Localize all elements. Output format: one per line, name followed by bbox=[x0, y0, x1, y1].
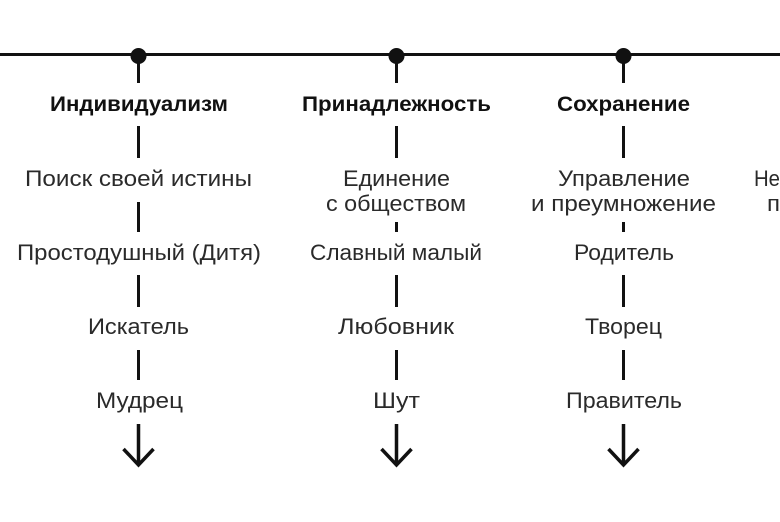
arrow down bbox=[124, 424, 154, 465]
heading: Индивидуализм bbox=[50, 93, 228, 116]
timeline dot bbox=[616, 48, 632, 64]
heading: Принадлежность bbox=[302, 93, 491, 116]
horizontal timeline line bbox=[0, 53, 780, 56]
timeline dot bbox=[130, 48, 146, 64]
label: quest line 1: Единение bbox=[343, 166, 450, 191]
label: archetype 3: Шут bbox=[373, 388, 420, 413]
label: archetype 2: Искатель bbox=[88, 314, 189, 339]
label: archetype 3: Правитель bbox=[566, 388, 682, 413]
label: quest line 1: Управление bbox=[558, 166, 690, 191]
label: quest line 2: и преумножение bbox=[531, 191, 716, 216]
connector stems bbox=[622, 56, 625, 380]
connector stems bbox=[395, 56, 398, 380]
arrow down bbox=[608, 424, 638, 465]
label: quest: Поиск своей истины bbox=[25, 166, 252, 191]
arrow down bbox=[382, 424, 412, 465]
label: archetype 1: Простодушный (Дитя) bbox=[17, 240, 261, 265]
column: Индивидуализм bbox=[17, 48, 261, 465]
column: Сохранение bbox=[531, 48, 716, 465]
label: archetype 1: Родитель bbox=[574, 240, 674, 265]
label: archetype 1: Славный малый bbox=[310, 240, 482, 265]
label: clipped line 2: п bbox=[767, 191, 780, 216]
label: archetype 2: Творец bbox=[585, 314, 662, 339]
label: archetype 2: Любовник bbox=[338, 314, 454, 339]
column: Принадлежность bbox=[302, 48, 491, 465]
timeline dot bbox=[388, 48, 404, 64]
heading: Сохранение bbox=[557, 93, 690, 116]
label: archetype 3: Мудрец bbox=[96, 388, 183, 413]
connector stems bbox=[137, 56, 140, 380]
column: clipped fourth column bbox=[754, 166, 780, 216]
label: quest line 2: с обществом bbox=[326, 191, 466, 216]
